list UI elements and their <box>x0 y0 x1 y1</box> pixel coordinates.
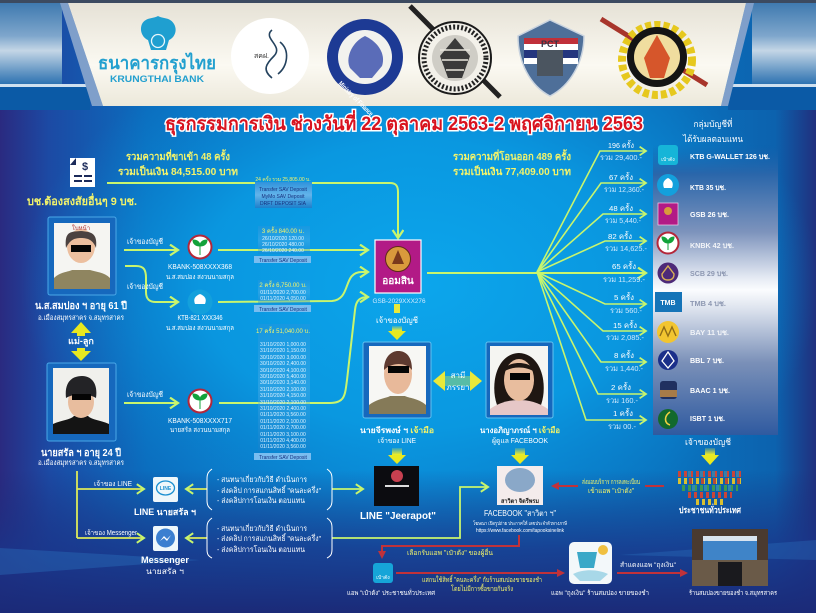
panel: transactions row 3: 31/10/2020 1,000.00 <box>260 342 306 348</box>
photo: shop <box>692 529 768 586</box>
outflow amounts: รวม 1,440.- <box>605 364 643 373</box>
outflow lines <box>427 151 646 420</box>
outflow amounts: 8 ครั้ง <box>614 350 634 360</box>
text: husband: เจ้าของ LINE <box>378 437 416 445</box>
outflow amounts: 48 ครั้ง <box>609 203 633 213</box>
panel: transactions row 2: 2 ครั้ง 6,750.00 บ. <box>259 279 307 289</box>
panel: transactions row 1: 3 ครั้ง 840.00 บ. <box>262 225 304 235</box>
outflow amounts: รวม 5,440.- <box>605 216 641 225</box>
text: son name <box>38 447 124 467</box>
panel: transactions row 3: 31/10/2020 2,100.00 <box>260 400 306 406</box>
panel: transactions row 2: 01/11/2020 2,700.00 <box>260 290 306 296</box>
GSB logo box: ออมสิน <box>382 275 414 287</box>
text: Facebook page <box>473 509 568 534</box>
text: KBANK 1 account <box>166 264 234 281</box>
arrow: down to Facebook <box>511 448 529 464</box>
text: mother name: อ.เมืองสมุทรสาคร จ.สมุทรสาคร <box>38 313 124 322</box>
arrow: mother-son relation <box>68 322 94 361</box>
text: husband <box>360 425 434 445</box>
icon: crowd <box>678 474 742 502</box>
panel: transactions row 1: 26/10/2020 120.00 <box>262 236 304 242</box>
text: Facebook page: โฆษณา เปิดรูปถ่าย ประกาศให้ เลขประจำตัวทางภาษี <box>473 520 568 527</box>
label: owner 3: เจ้าของบัญชี <box>127 390 163 399</box>
panel: transactions row 3: 01/11/2020 4,400.00 <box>260 438 306 444</box>
text: wife <box>480 425 560 445</box>
label: crowd owner: เจ้าของบัญชี <box>685 437 731 447</box>
text: son name: นายสรัล ฯ อายุ 24 ปี <box>41 447 121 459</box>
text: show app: สำแดงแอพ "ถุงเงิน" <box>620 561 677 569</box>
panel: transactions row 3: 01/11/2020 3,560.00 <box>260 412 306 418</box>
bank labels: ISBT 1 บช. <box>690 414 725 423</box>
text: wife: ผู้ดูแล FACEBOOK <box>492 437 548 445</box>
icon: document: $ <box>82 161 88 173</box>
text: Facebook page: FACEBOOK "สาวิตา ฯ" <box>484 509 556 518</box>
logo: PCT shield <box>518 20 584 96</box>
icon: BBL row <box>658 350 678 370</box>
text: KBANK 2 account <box>168 418 232 434</box>
icon: TMB row <box>655 292 682 312</box>
outflow amounts <box>600 140 647 431</box>
bracket block: LINE activities: - สนทนาเกี่ยวกับวิธี ดำเนินการ <box>217 474 307 484</box>
outflow amounts: รวม 00.- <box>608 422 636 431</box>
bank labels: GSB 26 บช. <box>690 210 729 219</box>
bank labels: KNBK 42 บช. <box>690 241 734 250</box>
icon: Pao Tang <box>373 563 393 583</box>
arrow: account owner <box>376 304 419 340</box>
text: use rights: โดยไม่มีการซื้อขายกันจริง <box>451 582 513 593</box>
panel: transactions row 3: 01/11/2020 3,560.00 <box>260 444 306 450</box>
red arrow: Pao Tang to Thung Ngoen <box>396 572 563 574</box>
text: mother name <box>35 300 127 322</box>
icon: LINE <box>153 477 178 502</box>
outflow amounts: 82 ครั้ง <box>608 231 632 241</box>
portrait: mother <box>48 217 116 295</box>
panel: transactions row 3: 01/11/2020 2,100.00 <box>260 419 306 425</box>
panel: transactions row 3 <box>254 324 311 461</box>
heading: incoming totals: รวมความที่ขาเข้า 48 ครั้ง <box>126 149 230 163</box>
panel: transactions row 3: 30/10/2020 3,140.00 <box>260 380 306 386</box>
panel: top transactions: MyMo SAV Deposit <box>262 194 305 200</box>
GSB logo box <box>375 240 421 293</box>
panel: transactions row 3: 01/11/2020 3,100.00 <box>260 432 306 438</box>
text: shop caption: ร้านสมปองขายของชำ จ.สมุทรสาคร <box>689 589 777 597</box>
red arrow: Thung Ngoen to shop <box>617 572 686 574</box>
icon: BAAC row <box>660 381 677 399</box>
portrait: husband <box>363 342 431 418</box>
panel: transactions row 3: 30/10/2020 4,100.00 <box>260 368 306 374</box>
text: people nationwide: ประชาชนทั่วประเทศ <box>679 503 741 515</box>
logo: black seal <box>410 6 500 97</box>
red arrow: Facebook to Pao Tang <box>382 535 519 557</box>
panel: transactions row 1: 26/10/2020 480.00 <box>262 242 304 248</box>
text: mother name: น.ส.สมปอง ฯ อายุ 61 ปี <box>35 300 127 312</box>
text: use rights: แสกนใช้สิทธิ์ "คนละครึ่ง" กับร้านสมปองขายของชำ <box>422 574 542 584</box>
heading: recipient group <box>682 117 743 144</box>
panel: transactions row 3: Transfer SAV Deposit <box>259 455 308 461</box>
Facebook page image: สาวิตา จิตรีพรม <box>501 497 539 505</box>
text: Thung Ngoen caption: แอพ "ถุงเงิน" ร้านสมปอง ขายของชำ <box>551 589 649 597</box>
logo: Ministry of Finance: Ministry of Finance <box>337 80 374 118</box>
bracket block: LINE activities: - ส่งคลิปการโอนเงิน ตอบแทน <box>217 496 305 505</box>
logo: white circle emblem <box>231 18 309 94</box>
text: KBANK 1 account: น.ส.สมปอง สงวนนามสกุล <box>166 274 234 281</box>
red arrow: crowd to Facebook <box>553 485 664 487</box>
title: ธุรกรรมการเงิน ช่วงวันที่ 22 ตุลาคม 2563-2 พฤศจิกายน 2563 <box>165 110 643 136</box>
text: KTB account <box>166 315 234 332</box>
panel: top transactions: 24 ครั้ง รวม 25,805.00 บ. <box>255 174 311 183</box>
icon: KBANK row <box>658 232 678 254</box>
bank labels: TMB 4 บช. <box>690 299 726 308</box>
text: use rights <box>422 574 542 593</box>
bank labels: BAY 11 บช. <box>690 328 729 337</box>
logo: PCT shield: PCT <box>541 39 560 49</box>
arrow: down to crowd <box>701 448 719 465</box>
panel: top transactions: Transfer SAV Deposit <box>259 187 308 193</box>
panel: transactions row 2 <box>254 279 311 313</box>
Facebook page image <box>497 466 543 505</box>
arrow: husband and wife: สามี <box>451 371 465 380</box>
outflow amounts: 65 ครั้ง <box>612 261 636 271</box>
panel: transactions row 3: 17 ครั้ง 51,040.00 บ. <box>256 325 310 335</box>
panel: top transactions: DRFT DEPOSIT SIA <box>260 201 307 207</box>
panel: transactions row 1: Transfer SAV Deposit <box>259 258 308 264</box>
bracket block: LINE activities: - ส่งคลิป การสแกนสิทธิ์ "คนละครึ่ง" <box>217 485 321 495</box>
panel: transactions row 1: 26/10/2020 240.00 <box>262 248 304 254</box>
arrow: mother-son relation: แม่-ลูก <box>68 336 94 347</box>
bracket block: Messenger activities: - ส่งคลิปการโอนเงิน ตอบแทน <box>217 545 305 554</box>
icon: KTB G-Wallet <box>658 145 678 165</box>
text: Facebook page: https://www.facebook.com/tapooksinelink <box>476 528 564 534</box>
icon: LINE: LINE <box>160 486 172 492</box>
icon: ISBT row <box>658 409 678 429</box>
panel: transactions row 3: 30/10/2020 5,400.00 <box>260 374 306 380</box>
icon: GSB row <box>658 203 678 225</box>
text: Messenger account: นายสรัล ฯ <box>146 567 184 576</box>
bank labels: KTB G-WALLET 126 บช. <box>690 152 770 161</box>
panel: transactions row 3: 30/10/2020 3,000.00 <box>260 355 306 361</box>
flow lines to GSB <box>107 183 398 403</box>
text: KTB account: KTB-821 XXX346 <box>178 315 223 322</box>
icon: SCB row <box>658 262 678 284</box>
bank labels: BAAC 1 บช. <box>690 386 730 395</box>
text: KBANK 2 account: KBANK-508XXXX717 <box>168 418 232 425</box>
icon: Thung Ngoen <box>569 542 612 584</box>
icon: KTB <box>188 290 212 314</box>
text: Messenger account <box>141 555 189 576</box>
panel: top transactions <box>255 174 312 208</box>
phone: LINE Jeerapot <box>360 466 436 522</box>
logo: gold emblem <box>601 19 707 95</box>
panel: recipient banks <box>653 117 778 435</box>
phone: LINE Jeerapot: LINE "Jeerapot" <box>360 511 436 522</box>
label: owner 2: เจ้าของบัญชี <box>127 282 163 291</box>
text: Pao Tang caption: แอพ "เป๋าตัง" ประชาชนทั่วประเทศ <box>347 588 436 597</box>
icon: Pao Tang: เป๋าตัง <box>376 574 390 581</box>
icon: KBANK 2 <box>188 390 212 412</box>
icon: BAY row <box>657 321 679 343</box>
arrow: husband and wife: ภรรยา <box>446 383 470 392</box>
text: KBANK 2 account: นายสรัล สงวนนามสกุล <box>170 426 230 434</box>
text: Messenger account: Messenger <box>141 555 189 565</box>
icon: KBANK 1 <box>188 236 212 258</box>
text: husband: นายจีรพงษ์ ฯ เจ้ามือ <box>360 425 434 435</box>
icon: Messenger <box>153 526 178 551</box>
arrow: account owner: เจ้าของบัญชี <box>376 316 419 325</box>
panel: transactions row 3: 31/10/2020 1,150.00 <box>260 348 306 354</box>
outflow amounts: รวม 560.- <box>610 306 642 315</box>
portrait: wife <box>486 342 553 418</box>
outflow amounts: รวม 2,085.- <box>606 333 644 342</box>
label: Messenger owner: เจ้าของ Messenger <box>85 529 138 537</box>
icon: KTB row <box>657 174 679 196</box>
outflow amounts: 67 ครั้ง <box>609 172 633 182</box>
text: wife: นางอภิญาภรณ์ ฯ เจ้ามือ <box>480 425 560 436</box>
text: son name: อ.เมืองสมุทรสาคร จ.สมุทรสาคร <box>38 458 124 467</box>
bracket block: Messenger activities: - ส่งคลิป การสแกนสิทธิ์ "คนละครึ่ง" <box>217 533 321 543</box>
arrow: husband and wife <box>433 371 482 392</box>
panel: transactions row 1 <box>254 225 311 264</box>
heading: outgoing totals: รวมความที่โอนออก 489 ครั้ง <box>453 149 571 163</box>
outflow amounts: 5 ครั้ง <box>614 292 634 302</box>
text: GSB account: GSB-2029XXX276 <box>372 298 426 305</box>
text: KTB account: น.ส.สมปอง สงวนนามสกุล <box>166 325 234 332</box>
panel: transactions row 3: 31/10/2020 2,400.00 <box>260 406 306 412</box>
bracket block: Messenger activities: - สนทนาเกี่ยวกับวิธี ดำเนินการ <box>217 523 307 533</box>
label: LINE owner: เจ้าของ LINE <box>94 480 132 488</box>
heading: outgoing totals: รวมเป็นเงิน 77,409.00 บาท <box>453 164 571 178</box>
portrait: son <box>47 363 116 441</box>
arrow: down to LINE <box>388 448 406 464</box>
icon: TMB row: TMB <box>660 300 676 307</box>
heading: incoming totals: รวมเป็นเงิน 84,515.00 บาท <box>118 164 238 178</box>
panel: transactions row 3: 01/11/2020 2,700.00 <box>260 425 306 431</box>
header band <box>68 3 746 106</box>
panel: transactions row 2: Transfer SAV Deposit <box>259 307 308 313</box>
flow: son to LINE and Messenger <box>77 471 488 538</box>
outflow amounts: 1 ครั้ง <box>613 408 633 418</box>
portrait: mother: ใบหน้า <box>72 224 90 232</box>
bank labels <box>690 152 770 423</box>
text: LINE account: LINE นายสรัล ฯ <box>134 507 196 517</box>
text: register service: เข้าแอพ "เป๋าตัง" <box>588 487 634 495</box>
panel: transactions row 3: 30/10/2020 2,400.00 <box>260 361 306 367</box>
outflow amounts: รวม 29,400.- <box>600 153 642 162</box>
logo: Krungthai Bank: ธนาคารกรุงไทย <box>98 52 216 75</box>
outflow amounts: 15 ครั้ง <box>613 320 637 330</box>
bank labels: SCB 29 บช. <box>690 269 728 278</box>
text: register service: ส่งมอบบริการ การลงทะเบียน <box>582 478 640 486</box>
icon: KTB G-Wallet: เป๋าตัง <box>661 156 675 163</box>
label: suspect accounts: บช.ต้องสงสัยอื่นๆ 9 บช. <box>27 193 137 208</box>
logo: Krungthai Bank <box>98 16 216 84</box>
icon: document <box>70 158 95 187</box>
logo: white circle emblem: สคฝ. <box>254 53 269 60</box>
label: owner 1: เจ้าของบัญชี <box>127 237 163 246</box>
outflow amounts: 2 ครั้ง <box>611 382 631 392</box>
bracket block: LINE activities <box>207 469 332 510</box>
outflow amounts: รวม 160.- <box>606 396 638 405</box>
bracket block: Messenger activities <box>207 518 332 558</box>
outflow amounts: 196 ครั้ง <box>608 140 634 150</box>
bank labels: BBL 7 บช. <box>690 356 724 365</box>
bank labels: KTB 35 บช. <box>690 183 726 192</box>
metallic header sides <box>0 0 816 110</box>
outflow amounts: รวม 11,259.- <box>603 275 645 284</box>
heading: incoming totals <box>118 149 238 178</box>
outflow amounts: รวม 12,360.- <box>604 185 644 194</box>
heading: outgoing totals <box>453 149 571 178</box>
heading: recipient group: ได้รับผลตอบแทน <box>682 134 743 144</box>
panel: transactions row 2: 01/11/2020 4,050.00 <box>260 296 306 302</box>
logo: Krungthai Bank: KRUNGTHAI BANK <box>110 74 205 84</box>
text: KBANK 1 account: KBANK-508XXXX368 <box>168 264 232 271</box>
logo: Ministry of Finance <box>327 19 403 118</box>
text: register service <box>582 478 640 495</box>
panel: transactions row 3: 31/10/2020 4,150.00 <box>260 393 306 399</box>
panel: transactions row 3: 31/10/2020 2,100.00 <box>260 387 306 393</box>
outflow amounts: รวม 14,625.- <box>605 244 647 253</box>
heading: recipient group: กลุ่มบัญชีที่ <box>694 117 733 130</box>
text: choose app: เลือกรับแอพ ''เป๋าตัง'' ของผู้อื่น <box>407 548 493 557</box>
